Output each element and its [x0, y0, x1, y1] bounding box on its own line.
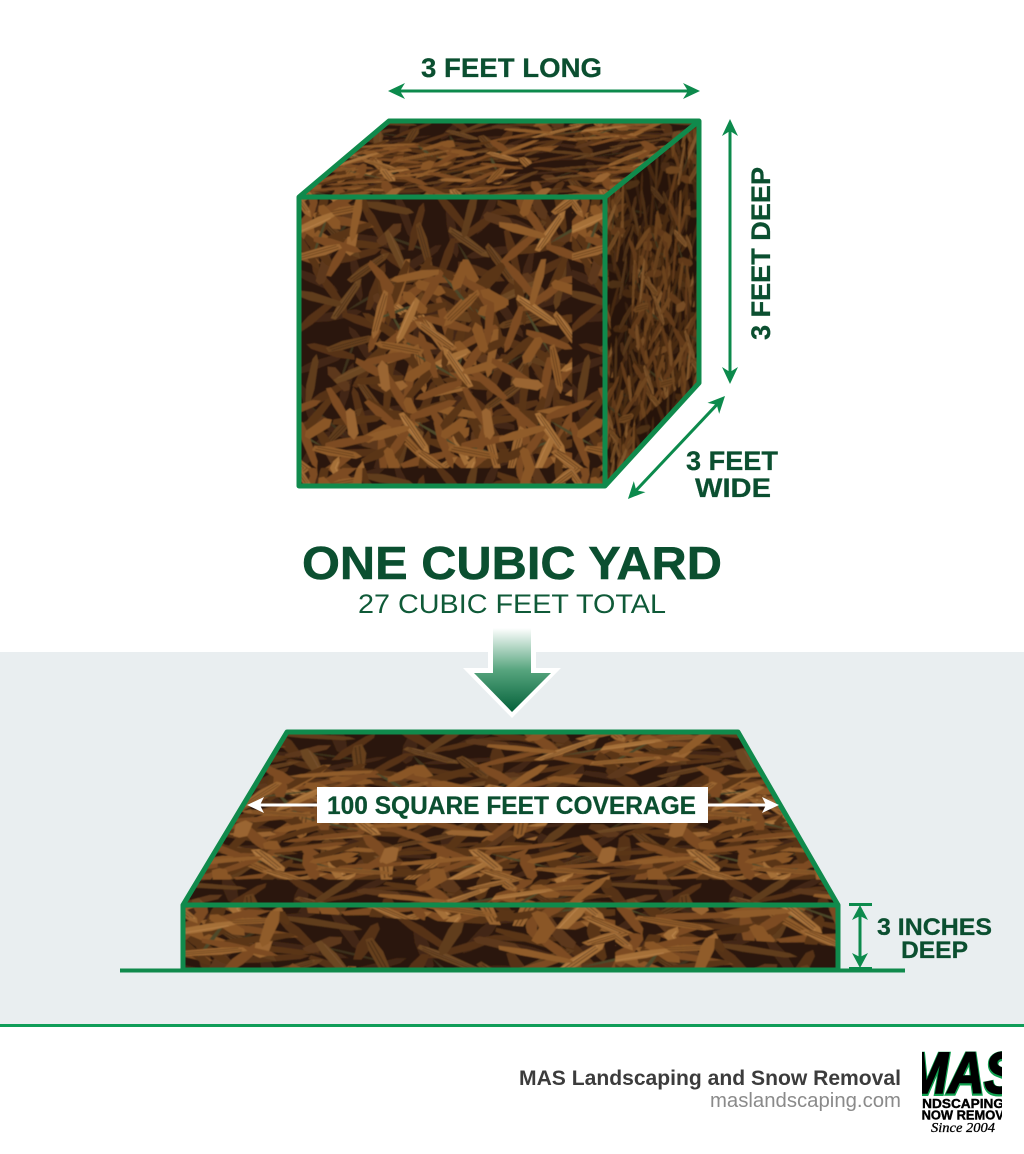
arrow: 3 inches deep	[849, 903, 872, 970]
company logo: Since 2004	[931, 1120, 995, 1135]
arrow: 3 feet long	[388, 83, 700, 99]
cube right side face	[605, 121, 699, 486]
coverage arrows	[247, 797, 779, 813]
label: 3 inches deep: DEEP	[901, 937, 968, 964]
mulch coverage slab	[183, 731, 838, 970]
cube front face	[299, 197, 605, 486]
label: 3 inches deep: 3 INCHES	[877, 914, 992, 941]
slab top surface	[183, 731, 838, 905]
title: one cubic yard: ONE CUBIC YARD	[302, 537, 722, 589]
label: 3 feet wide: 3 FEET	[686, 446, 778, 476]
subtitle: 27 cubic feet total: 27 CUBIC FEET TOTAL	[358, 589, 666, 619]
company logo	[922, 1051, 1002, 1132]
ground line	[120, 968, 905, 972]
label: 3 feet wide: WIDE	[695, 473, 771, 503]
company website: maslandscaping.com	[710, 1090, 901, 1112]
light coverage panel background	[0, 652, 1024, 1025]
label: 3 inches deep	[877, 914, 992, 964]
arrow: 3 feet deep	[722, 119, 738, 384]
mulch cube	[299, 121, 699, 486]
company logo: SNOW REMOVAL	[913, 1108, 1020, 1122]
arrow: 3 feet wide	[622, 391, 731, 504]
label: 3 feet deep: 3 FEET DEEP	[746, 167, 776, 340]
down arrow	[463, 628, 561, 718]
label: 3 feet wide	[686, 446, 778, 503]
company logo: LANDSCAPING	[904, 1096, 1004, 1111]
cube green outline	[299, 121, 699, 486]
coverage label: 100 SQUARE FEET COVERAGE	[327, 792, 696, 820]
slab green outline	[183, 732, 838, 970]
company name: MAS Landscaping and Snow Removal	[519, 1067, 901, 1090]
slab front edge	[183, 905, 838, 970]
label: 3 feet long: 3 FEET LONG	[421, 53, 602, 83]
footer divider line	[0, 1024, 1024, 1027]
cube top face	[299, 121, 699, 197]
